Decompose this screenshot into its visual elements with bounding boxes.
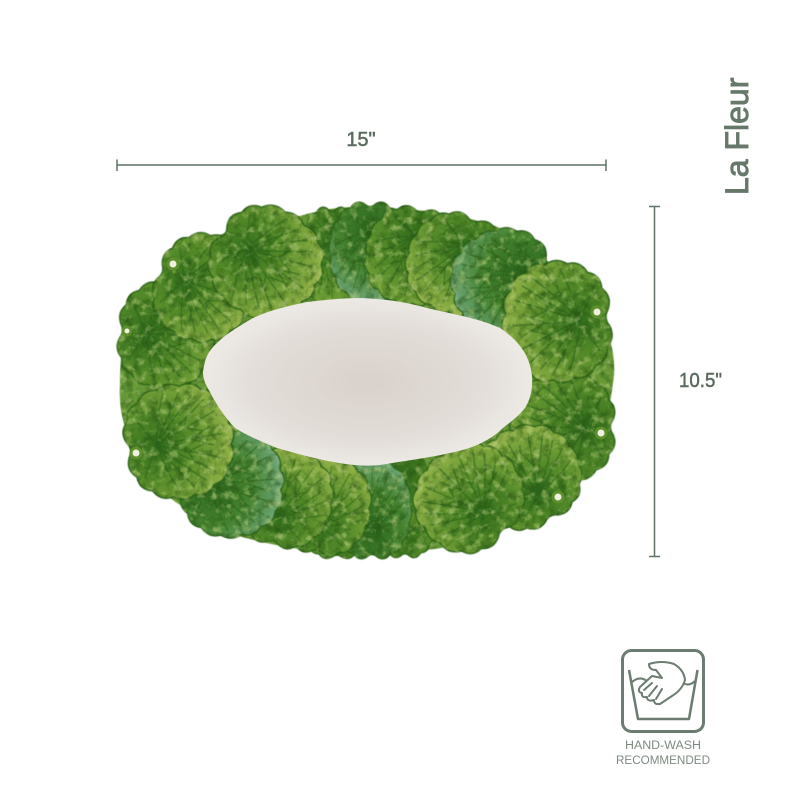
care icon: hand wash <box>616 650 710 767</box>
height dimension <box>649 206 722 557</box>
height label: 10.5" <box>679 370 722 392</box>
care label: RECOMMENDED <box>616 755 710 767</box>
handle holes <box>123 259 606 502</box>
hand <box>639 662 685 704</box>
width dimension <box>117 129 606 171</box>
platter <box>114 185 616 573</box>
platter well <box>203 298 532 466</box>
base ring <box>120 207 614 555</box>
water line <box>631 678 695 685</box>
icon frame <box>622 650 704 732</box>
width label: 15" <box>346 129 376 151</box>
wash tub <box>629 670 698 719</box>
title: La Fleur: La Fleur <box>719 77 755 195</box>
care label top line: HAND-WASH <box>625 740 701 752</box>
leaf border <box>114 185 616 573</box>
